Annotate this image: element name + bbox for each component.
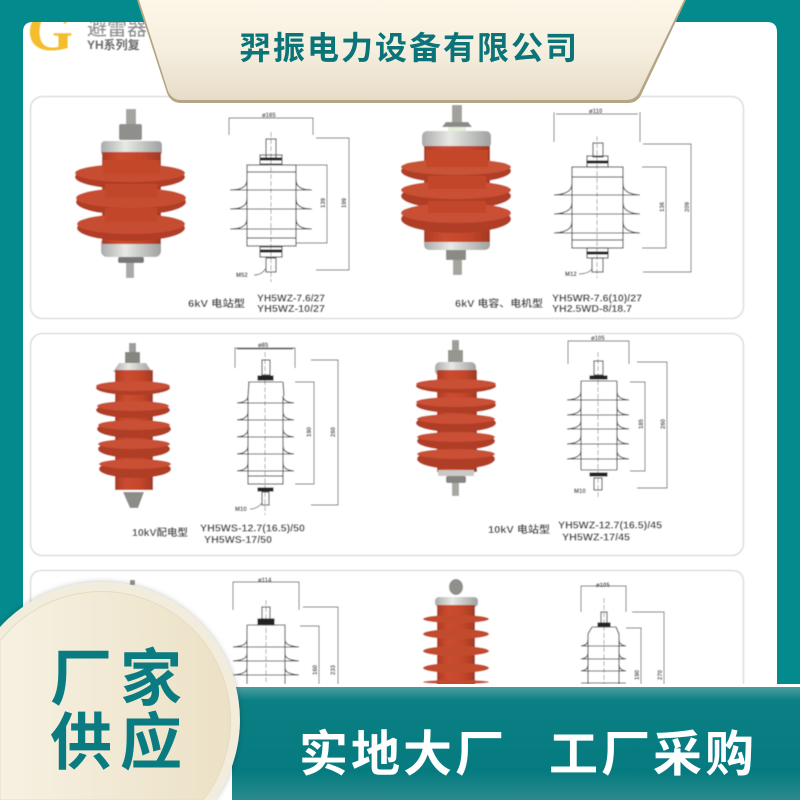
arrester photo 1 — [75, 109, 186, 278]
dimension drawing 1: 199 — [342, 197, 348, 208]
caption 4 — [488, 520, 662, 544]
dimension drawing 2: M12 — [565, 272, 577, 278]
badge text line 2: 供应 — [50, 709, 190, 778]
bar text left: 实地大厂 — [299, 728, 507, 782]
caption 4: 10kV 电站型 — [488, 523, 550, 536]
dimension drawing 4: 260 — [661, 418, 667, 429]
dimension drawing 5: ø114 — [258, 578, 272, 584]
catalogue heading: YH系列复 — [87, 37, 140, 52]
panel: 10kV distribution type — [30, 334, 744, 556]
caption 1: YH5WZ-7.6/27 — [257, 294, 325, 304]
dimension drawing 1 — [229, 113, 349, 282]
dimension drawing 3 — [235, 343, 338, 515]
dimension drawing 2 — [554, 109, 691, 278]
arrester photo 5 tip — [130, 580, 135, 585]
dimension drawing 2: 209 — [685, 201, 691, 212]
dimension drawing 6: 190 — [635, 669, 641, 680]
dimension drawing 3: M10 — [235, 507, 247, 513]
dimension drawing 1: ø165 — [262, 113, 276, 119]
catalogue heading — [87, 17, 147, 52]
dimension drawing 1: M52 — [236, 273, 248, 279]
badge text line 1: 厂家 — [50, 645, 190, 714]
arrester photo 6 — [423, 579, 489, 685]
logo: yellow G: G — [27, 1, 73, 63]
caption 1: YH5WZ-10/27 — [257, 304, 325, 315]
dimension drawing 5: 233 — [331, 664, 337, 675]
caption 2: YH2.5WD-8/18.7 — [552, 304, 632, 315]
dimension drawing 6 — [581, 583, 664, 684]
dimension drawing 4 — [567, 336, 667, 498]
caption 3: YH5WS-12.7(16.5)/50 — [200, 524, 305, 534]
dimension drawing 6: ø105 — [596, 583, 610, 589]
dimension drawing 2: ø110 — [589, 109, 603, 115]
dimension drawing 3: ø85 — [258, 343, 269, 349]
caption 2 — [455, 294, 642, 315]
caption 2: 6kV 电容、电机型 — [455, 297, 543, 310]
dimension drawing 4: 185 — [639, 418, 645, 429]
caption 3: YH5WS-17/50 — [204, 535, 272, 546]
catalogue image — [27, 1, 744, 685]
caption 3: 10kV配电型 — [132, 526, 188, 539]
dimension drawing 6: 270 — [658, 669, 664, 680]
dimension drawing 3: 260 — [331, 426, 337, 437]
caption 4: YH5WZ-17/45 — [562, 532, 630, 544]
caption 4: YH5WZ-12.7(16.5)/45 — [558, 520, 662, 532]
arrester photo 4 — [416, 340, 496, 496]
bottom bar — [232, 687, 800, 800]
catalogue heading: 避雷器 — [87, 17, 147, 40]
dimension drawing 4: M10 — [574, 489, 586, 495]
banner: company name — [137, 0, 686, 103]
caption 2: YH5WR-7.6(10)/27 — [552, 294, 642, 304]
arrester photo 2 — [401, 105, 511, 275]
dimension drawing 1: 139 — [321, 197, 327, 208]
arrester photo 3 — [96, 343, 171, 508]
title: 羿振电力设备有限公司 — [239, 30, 579, 66]
caption 3 — [132, 524, 305, 546]
caption 1 — [188, 294, 325, 315]
dimension drawing 5 — [233, 578, 338, 684]
panel: 6kV station type — [30, 96, 744, 318]
dimension drawing 4: ø105 — [591, 336, 605, 342]
bar text right: 工厂采购 — [549, 728, 757, 782]
dimension drawing 3: 190 — [307, 426, 313, 437]
caption 1: 6kV 电站型 — [188, 297, 245, 310]
badge: factory supply — [0, 582, 240, 800]
dimension drawing 5: 160 — [313, 664, 319, 675]
dimension drawing 2: 136 — [660, 201, 666, 212]
panel: third row, partly covered — [30, 570, 744, 685]
